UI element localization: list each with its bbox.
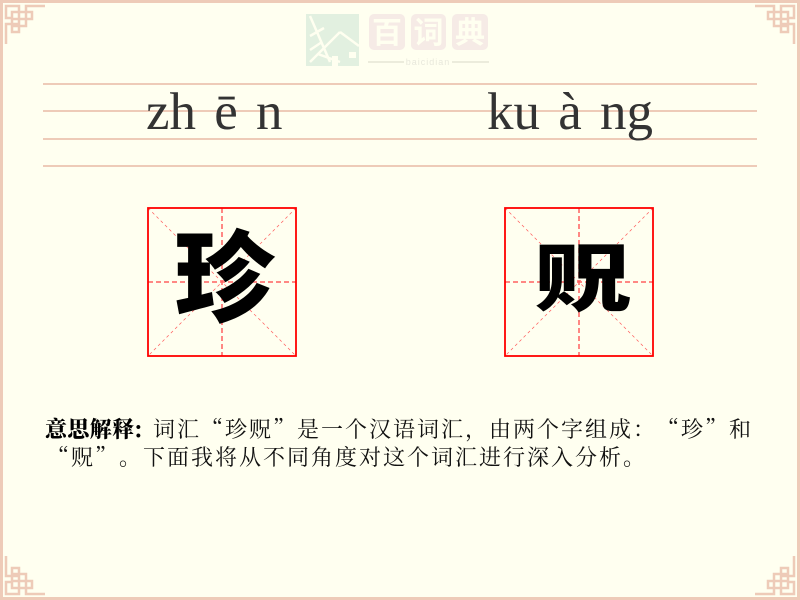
character grid: 珍 [147, 198, 297, 357]
logo watermark [306, 8, 489, 67]
logo subtitle: baicidian: baicidian [406, 57, 450, 67]
character grid: 贶 [504, 207, 654, 357]
logo wordmark: 百词典: 典 [455, 8, 485, 52]
character 珍: 珍 [174, 198, 274, 343]
pinyin: kuàng: ku à ng [487, 83, 653, 141]
logo wordmark: 百词典: 词 [414, 8, 444, 52]
logo wordmark: 百词典: 百 [372, 8, 402, 52]
icon: green seal with bamboo house [306, 14, 359, 66]
explanation text: 意思解释: [45, 413, 142, 444]
logo subtitle: baicidian [368, 57, 489, 67]
pinyin ruled lines [43, 83, 757, 167]
character 贶: 贶 [535, 218, 631, 327]
explanation text [45, 413, 753, 472]
pinyin: zhēn: zh ē n [146, 83, 283, 141]
explanation text: 词汇“珍贶”是一个汉语词汇，由两个字组成：“珍”和 [153, 413, 753, 444]
explanation text: “贶”。下面我将从不同角度对这个词汇进行深入分析。 [47, 441, 647, 472]
logo wordmark: 百词典 [369, 8, 488, 52]
